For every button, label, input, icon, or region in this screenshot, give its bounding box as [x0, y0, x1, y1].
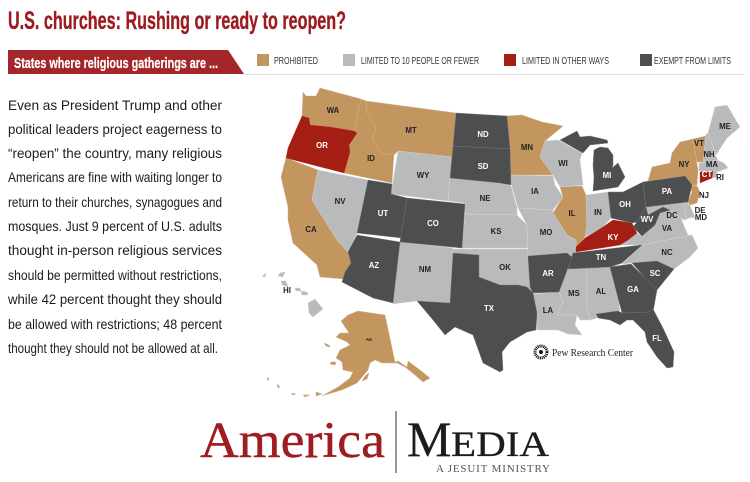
- states: exempt from limits: [342, 113, 692, 372]
- legend: [257, 54, 731, 67]
- title: U.S. churches: Rushing or ready to reopen?: [8, 7, 346, 35]
- state labels: [283, 106, 731, 343]
- legend item: prohibited: [257, 54, 318, 67]
- state labels: WY: [417, 171, 430, 180]
- banner: states where religious gatherings are: States where religious gatherings are ...: [14, 56, 218, 72]
- map: U.S. states by restriction on religious gatherings: [262, 88, 740, 397]
- state labels: DE: [695, 206, 705, 215]
- state labels: MI: [603, 171, 611, 180]
- state labels: MN: [521, 143, 533, 152]
- state labels: RI: [716, 173, 724, 182]
- state labels: MO: [540, 228, 552, 237]
- legend item: prohibited: PROHIBITED: [274, 56, 318, 67]
- state labels: VA: [662, 224, 672, 233]
- state labels: MT: [405, 126, 417, 135]
- logo: America Media: M: [407, 411, 451, 467]
- state labels: CO: [427, 219, 439, 228]
- text block: article paragraph: [7, 97, 222, 356]
- state labels: NV: [335, 197, 346, 206]
- icon: Pew Research Center logo: Pew Research Center: [552, 347, 633, 359]
- state labels: NE: [480, 194, 490, 203]
- text block: article paragraph: “reopen” the country, many religious: [8, 145, 222, 161]
- state labels: TX: [484, 304, 495, 313]
- legend item: limited to 10 people or fewer: LIMITED TO 10 PEOPLE OR FEWER: [361, 56, 479, 67]
- state labels: CT: [702, 170, 712, 179]
- state labels: NJ: [699, 191, 709, 200]
- state labels: AZ: [369, 261, 379, 270]
- state labels: MA: [706, 160, 718, 169]
- state labels: OH: [619, 200, 631, 209]
- states: prohibited: [267, 88, 706, 397]
- state labels: IN: [594, 208, 602, 217]
- state labels: ME: [719, 122, 731, 131]
- banner: states where religious gatherings are: [8, 50, 244, 74]
- state labels: NC: [661, 248, 673, 257]
- state labels: DC: [666, 211, 678, 220]
- legend item: limited in other ways: LIMITED IN OTHER WAYS: [522, 56, 609, 67]
- state labels: ND: [477, 130, 489, 139]
- state labels: ID: [367, 154, 375, 163]
- state labels: TN: [596, 253, 607, 262]
- state labels: MD: [695, 213, 707, 222]
- logo: America Media: [200, 411, 550, 475]
- state labels: GA: [627, 285, 639, 294]
- text block: article paragraph: be allowed with restrictions; 48 percent: [8, 316, 222, 332]
- state labels: WI: [558, 159, 568, 168]
- state labels: PA: [662, 187, 672, 196]
- states: limited in other ways: [286, 116, 713, 252]
- logo: America Media: EDIA: [451, 424, 549, 464]
- state labels: UT: [378, 209, 388, 218]
- state labels: WV: [641, 215, 654, 224]
- state labels: IL: [569, 209, 576, 218]
- state labels: HI: [283, 286, 291, 295]
- states: limited to 10 people or fewer: [262, 105, 740, 335]
- icon: Pew Research Center logo: [535, 346, 633, 359]
- state labels: VT: [694, 139, 704, 148]
- state labels: OR: [316, 141, 328, 150]
- state labels: NH: [703, 150, 715, 159]
- text block: article paragraph: should be permitted without restrictions,: [8, 267, 222, 283]
- state labels: SC: [650, 269, 661, 278]
- state labels: LA: [543, 306, 554, 315]
- state labels: AK: [366, 337, 373, 342]
- state labels: MS: [568, 289, 580, 298]
- state labels: CA: [305, 225, 317, 234]
- state labels: KY: [608, 233, 619, 242]
- state labels: IA: [531, 187, 539, 196]
- state labels: NY: [679, 160, 690, 169]
- state labels: FL: [652, 334, 662, 343]
- text block: article paragraph: Even as President Trump and other: [8, 97, 222, 113]
- state labels: NM: [419, 265, 431, 274]
- state labels: SD: [478, 162, 489, 171]
- text block: article paragraph: mosques. Just 9 percent of U.S. adults: [8, 218, 222, 234]
- state labels: WA: [327, 106, 340, 115]
- state labels: OK: [499, 263, 511, 272]
- legend item: limited in other ways: [504, 54, 609, 67]
- legend item: exempt from limits: [640, 54, 731, 67]
- text block: article paragraph: Americans are fine with waiting longer to: [8, 169, 222, 185]
- logo: America Media: A JESUIT MINISTRY: [436, 463, 550, 475]
- state labels: AL: [596, 287, 606, 296]
- text block: article paragraph: thought they should not be allowed at all.: [8, 340, 218, 356]
- state labels: KS: [491, 227, 501, 236]
- logo: America Media: America: [200, 413, 385, 469]
- text block: article paragraph: return to their churches, synagogues and: [8, 194, 222, 210]
- text block: article paragraph: while 42 percent thought they should: [7, 291, 222, 307]
- state labels: AR: [542, 269, 554, 278]
- legend item: limited to 10 people or fewer: [343, 54, 479, 67]
- text block: article paragraph: political leaders project eagerness to: [8, 121, 222, 137]
- text block: article paragraph: thought in-person religious services: [8, 242, 222, 258]
